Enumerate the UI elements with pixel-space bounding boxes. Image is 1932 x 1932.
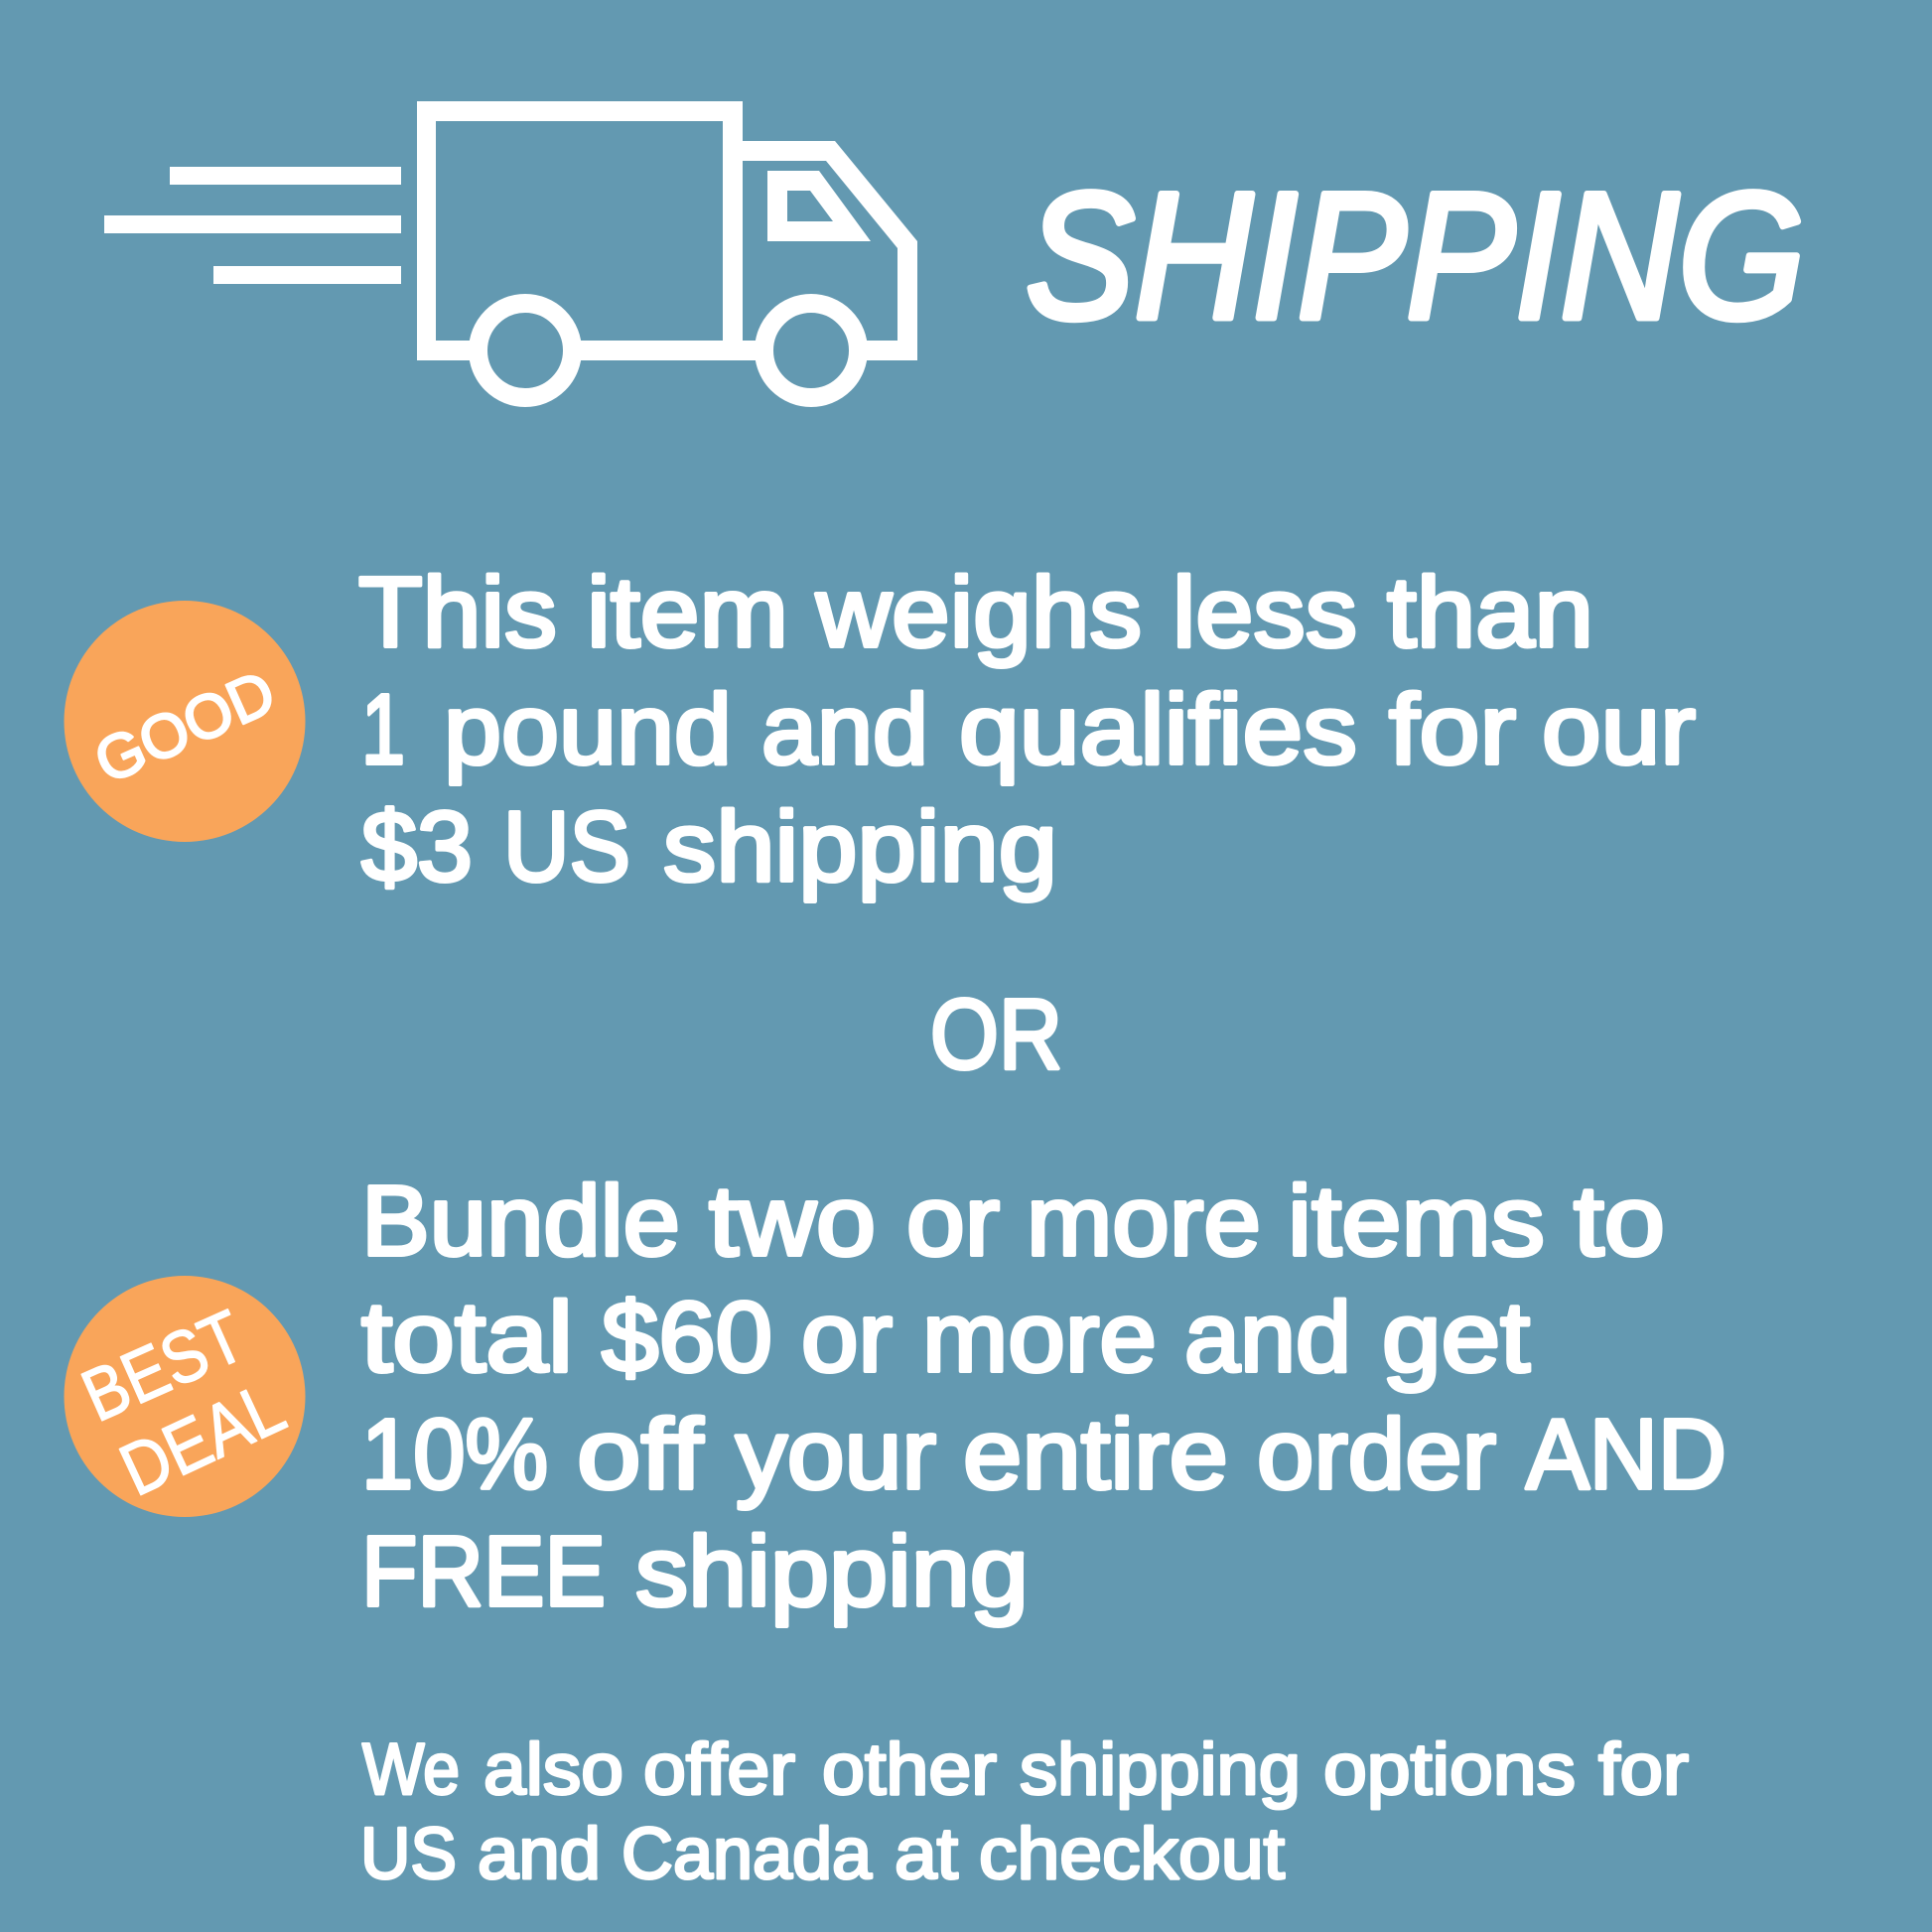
speed lines xyxy=(104,167,401,284)
text block: best deal option: entire xyxy=(963,1399,1228,1510)
text block: best deal option: total xyxy=(361,1282,573,1393)
footer note: other xyxy=(822,1729,997,1810)
footer note: at xyxy=(895,1814,958,1894)
text block: good option: and xyxy=(761,674,928,785)
text block: best deal option: more xyxy=(1027,1166,1261,1277)
text block: best deal option: items xyxy=(1288,1166,1545,1277)
text block: best deal option: your xyxy=(736,1399,936,1510)
text block: best deal option: Bundle xyxy=(361,1166,680,1277)
text block: best deal option: FREE xyxy=(361,1516,606,1627)
footer note: and xyxy=(478,1814,601,1894)
footer note: shipping xyxy=(1020,1729,1301,1810)
text block: good option: than xyxy=(1387,557,1593,668)
text block: good option: US xyxy=(503,791,630,902)
badge: best deal: BEST xyxy=(70,1294,256,1438)
text block: best deal option: or xyxy=(906,1166,1000,1277)
footer note xyxy=(360,1729,1689,1894)
text block: good option: our xyxy=(1542,674,1696,785)
text block: best deal option: order xyxy=(1257,1399,1496,1510)
footer note: Canada xyxy=(621,1814,872,1894)
footer note: options xyxy=(1323,1729,1576,1810)
text block: good option: pound xyxy=(444,674,732,785)
badge: best deal xyxy=(64,1276,306,1517)
text block: best deal option: 10% xyxy=(361,1399,548,1510)
text block: best deal option: or xyxy=(801,1282,893,1393)
truck body xyxy=(417,101,917,360)
text block: good option: qualifies xyxy=(959,674,1357,785)
text block: good option xyxy=(358,557,1696,902)
rear wheel xyxy=(479,304,572,397)
text block: best deal option: and xyxy=(1184,1282,1351,1393)
text block: good option: weighs xyxy=(815,557,1142,668)
footer note: We xyxy=(362,1729,460,1810)
text block: best deal option: two xyxy=(709,1166,876,1277)
footer note: US xyxy=(360,1814,457,1894)
text block: good option: $3 xyxy=(361,791,473,902)
text block: best deal option: more xyxy=(922,1282,1157,1393)
text block: best deal option: off xyxy=(577,1399,703,1510)
text block: good option: This xyxy=(358,557,557,668)
text block: best deal option: to xyxy=(1574,1166,1665,1277)
badge: best deal: DEAL xyxy=(108,1365,297,1512)
cab window xyxy=(767,171,871,241)
footer note: checkout xyxy=(979,1814,1285,1894)
separator word: OR: OR xyxy=(930,979,1062,1090)
text block: good option: 1 xyxy=(361,674,405,785)
front wheel xyxy=(764,304,858,397)
text block: best deal option: get xyxy=(1382,1282,1530,1393)
text block: best deal option xyxy=(361,1166,1726,1627)
badge: good: GOOD xyxy=(85,657,285,797)
text block: good option: for xyxy=(1389,674,1516,785)
text block: best deal option: shipping xyxy=(635,1516,1029,1627)
badge: good xyxy=(64,601,306,842)
icon: delivery truck with speed lines xyxy=(104,101,917,397)
text block: best deal option: $60 xyxy=(602,1282,772,1393)
title: SHIPPING xyxy=(1026,156,1805,356)
text block: best deal option: AND xyxy=(1526,1399,1726,1510)
text block: good option: item xyxy=(587,557,788,668)
footer note: for xyxy=(1598,1729,1689,1810)
text block: good option: less xyxy=(1173,557,1357,668)
footer note: also xyxy=(483,1729,623,1810)
footer note: offer xyxy=(643,1729,795,1810)
text block: good option: shipping xyxy=(663,791,1057,902)
